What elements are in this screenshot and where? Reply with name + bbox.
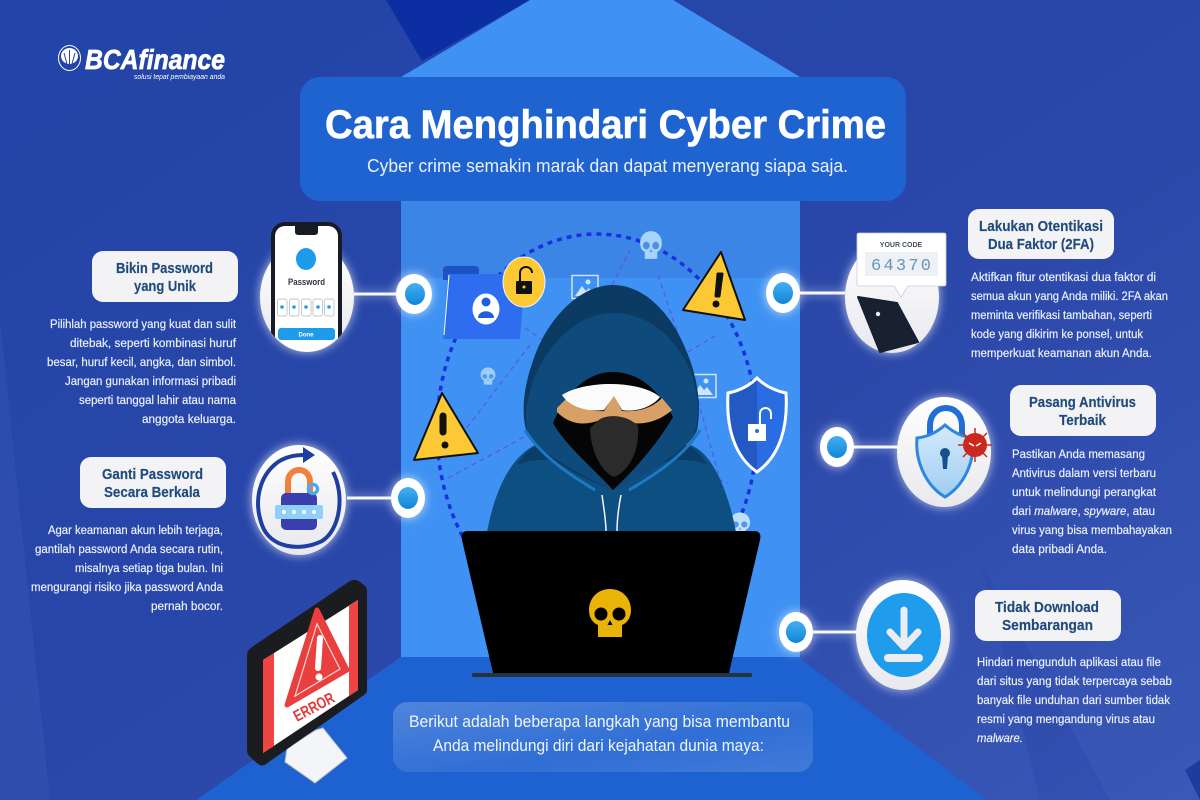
body text <box>977 655 1172 745</box>
panel: bikin password <box>47 222 354 426</box>
drawstrings <box>602 495 621 532</box>
icon: code phone: YOUR CODE <box>880 242 923 249</box>
body text <box>31 523 223 613</box>
network lines <box>448 250 728 483</box>
heading chip: Pasang Antivirus <box>1029 395 1136 411</box>
icon: open padlock <box>503 257 545 307</box>
dashed orbit <box>437 234 757 626</box>
error label: ERROR <box>291 690 338 726</box>
body text: meminta verifikasi tambahan, seperti <box>971 308 1152 322</box>
monitor stand <box>285 728 347 783</box>
body text: mengurangi risiko jika password Anda <box>31 580 223 594</box>
body text: Pastikan Anda memasang <box>1012 447 1145 461</box>
body text: ditebak, seperti kombinasi huruf <box>70 336 237 350</box>
body text: memperkuat keamanan akun Anda. <box>971 346 1152 360</box>
icon: image right <box>690 374 716 398</box>
mask <box>590 416 638 477</box>
red strips <box>263 600 358 753</box>
icon: download <box>856 580 950 690</box>
icon: password phone: Password <box>288 277 325 287</box>
heading chip <box>1010 385 1156 436</box>
heading chip: Sembarangan <box>1002 618 1093 634</box>
illustration: error monitor <box>247 580 367 783</box>
icon: warning left <box>414 393 478 460</box>
floor <box>196 657 987 800</box>
skin band <box>557 395 672 424</box>
heading chip: Dua Faktor (2FA) <box>988 237 1094 253</box>
icon: password phone <box>260 222 354 362</box>
body text: Jangan gunakan informasi pribadi <box>65 374 236 388</box>
body text: pernah bocor. <box>151 599 223 613</box>
icon: warning top right <box>683 252 745 320</box>
body text: dari situs yang tidak terpercaya sebab <box>977 674 1172 688</box>
icon: folder <box>443 266 525 339</box>
body text: gantilah password Anda secara rutin, <box>35 542 223 556</box>
center wall with roof <box>401 0 800 657</box>
icon: skull top <box>640 231 662 259</box>
heading chip <box>968 209 1114 259</box>
body text: malware. <box>977 731 1023 745</box>
title: Cara Menghindari Cyber Crime <box>325 103 886 147</box>
logo tagline: solusi tepat pembiayaan anda <box>134 74 225 81</box>
heading chip <box>975 590 1121 641</box>
body text: kode yang dikirim ke ponsel, untuk <box>971 327 1144 341</box>
body text <box>47 317 237 426</box>
monitor screen <box>263 600 358 753</box>
body text: anggota keluarga. <box>142 412 236 426</box>
icon: code phone: 64370 <box>871 257 931 276</box>
heading chip: Ganti Password <box>102 467 203 483</box>
logo <box>58 44 225 81</box>
body text <box>971 270 1168 360</box>
illustration: hacker network <box>414 231 786 677</box>
connector lines and nodes <box>347 273 898 652</box>
subtitle: Cyber crime semakin marak dan dapat menyerang siapa saja. <box>367 155 848 176</box>
icon: image top <box>572 276 598 298</box>
panel: antivirus <box>897 385 1172 556</box>
logo emblem <box>58 46 80 70</box>
body text: resmi yang mengandung virus atau <box>977 712 1155 726</box>
heading chip: Tidak Download <box>995 600 1099 616</box>
hoodie body <box>487 445 736 532</box>
body text: Pilihlah password yang kuat dan sulit <box>50 317 237 331</box>
hacker figure <box>487 285 736 532</box>
panel: ganti password <box>31 445 346 613</box>
panel: intro callout <box>393 702 813 772</box>
monitor frame <box>247 580 367 766</box>
face opening <box>553 372 673 490</box>
heading chip: Bikin Password <box>116 261 213 277</box>
body text: Agar keamanan akun lebih terjaga, <box>48 523 223 537</box>
heading chip: Terbaik <box>1059 413 1107 429</box>
body text: semua akun yang Anda miliki. 2FA akan <box>971 289 1168 303</box>
laptop <box>462 531 760 677</box>
goggles <box>562 384 660 411</box>
body text: banyak file unduhan dari sumber tidak <box>977 693 1171 707</box>
intro line 2: Anda melindungi diri dari kejahatan dunia maya: <box>433 736 764 755</box>
icon: laptop skull <box>589 589 631 637</box>
body text: dari malware, spyware, atau <box>1012 504 1155 518</box>
icon: password phone: Done <box>298 332 314 338</box>
icon: skull hidden <box>730 512 750 536</box>
body text <box>1012 447 1172 556</box>
heading chip <box>80 457 226 508</box>
intro line 1: Berikut adalah beberapa langkah yang bisa membantu <box>409 712 790 731</box>
heading chip: yang Unik <box>134 279 197 295</box>
warning sign <box>287 610 347 705</box>
icon: skull small <box>481 367 495 385</box>
body text: seperti tanggal lahir atau nama <box>79 393 236 407</box>
icon: shield <box>728 378 786 472</box>
heading chip: Secara Berkala <box>104 485 201 501</box>
body text: Aktifkan fitur otentikasi dua faktor di <box>971 270 1156 284</box>
body text: Hindari mengunduh aplikasi atau file <box>977 655 1161 669</box>
hood <box>524 285 699 490</box>
heading chip: Lakukan Otentikasi <box>979 219 1103 235</box>
panel: otentikasi dua faktor <box>845 209 1168 360</box>
body text: Antivirus dalam versi terbaru <box>1012 466 1156 480</box>
icon: rotating lock <box>252 445 346 555</box>
icon: code phone <box>845 233 946 353</box>
body text: misalnya setiap tiga bulan. Ini <box>75 561 223 575</box>
heading chip <box>92 251 238 302</box>
body text: virus yang bisa membahayakan <box>1012 523 1172 537</box>
panel: tidak download <box>856 580 1172 745</box>
icon: antivirus shield <box>897 397 992 507</box>
body text: data pribadi Anda. <box>1012 542 1107 556</box>
body text: untuk melindungi perangkat <box>1012 485 1157 499</box>
panel: title <box>300 77 906 201</box>
body text: besar, huruf kecil, angka, dan simbol. <box>47 355 236 369</box>
logo wordmark: BCAfinance <box>85 44 225 75</box>
